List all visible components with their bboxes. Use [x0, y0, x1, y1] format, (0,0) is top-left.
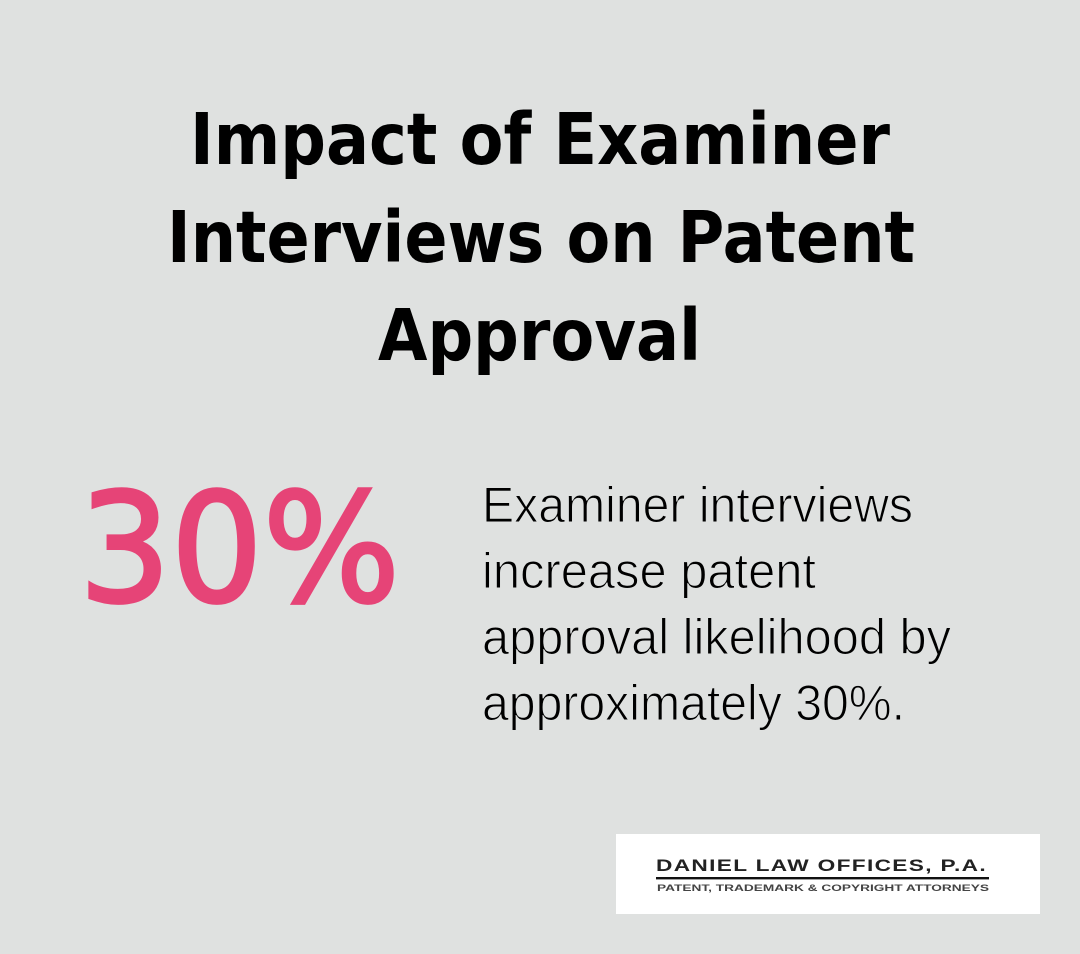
- logo: Daniel Law Offices: PATENT, TRADEMARK & COPYRIGHT ATTORNEYS: [657, 883, 989, 894]
- title: [167, 98, 915, 377]
- title: Interviews on Patent: [167, 196, 915, 279]
- title: Approval: [378, 294, 701, 377]
- description text: Examiner interviews: [482, 477, 913, 533]
- logo: Daniel Law Offices: [616, 834, 1040, 914]
- description text: approval likelihood by: [482, 609, 951, 665]
- description text: [482, 477, 951, 731]
- logo: Daniel Law Offices: DANIEL LAW OFFICES, P.A.: [656, 856, 987, 875]
- big statistic: 30%: 30%: [79, 461, 400, 637]
- title: Impact of Examiner: [190, 98, 890, 181]
- description text: approximately 30%.: [482, 675, 905, 731]
- description text: increase patent: [482, 543, 816, 599]
